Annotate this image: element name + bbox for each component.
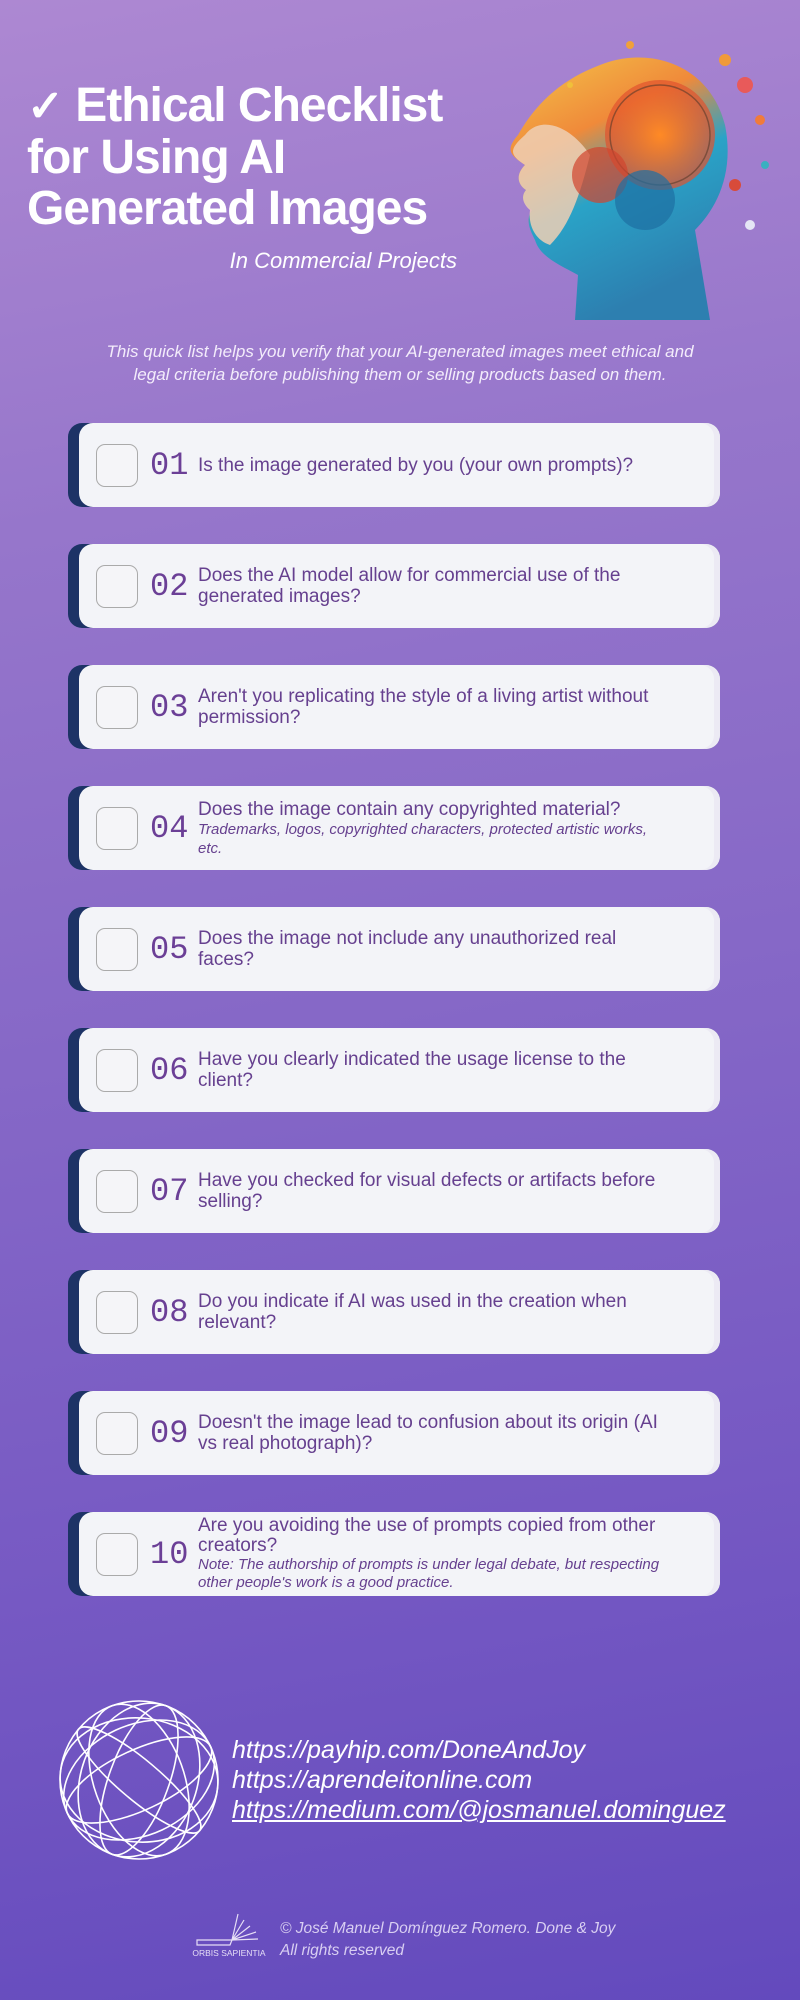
card 03: [68, 665, 720, 749]
card 09: [68, 1391, 720, 1475]
copyright: © José Manuel Domínguez Romero. Done & Joy: [280, 1920, 615, 1937]
card 01: 01: [150, 446, 188, 484]
card 10: [68, 1512, 720, 1596]
card 07: 07: [150, 1172, 188, 1210]
card 09: 09: [150, 1414, 188, 1452]
card 05: Does the image not include any unauthorized real faces?: [198, 928, 616, 970]
card 07: Have you checked for visual defects or artifacts before selling?: [198, 1170, 655, 1212]
card 06: [68, 1028, 720, 1112]
card 06: Have you clearly indicated the usage license to the client?: [198, 1049, 626, 1091]
card 07: [68, 1149, 720, 1233]
card 08: 08: [150, 1294, 188, 1330]
intro text: This quick list helps you verify that your AI-generated images meet ethical and legal criteria before publishing them or selling products based on them.: [106, 342, 694, 384]
card 08: Do you indicate if AI was used in the creation when relevant?: [198, 1291, 627, 1333]
card 02: [68, 544, 720, 628]
card 02: Does the AI model allow for commercial use of the generated images?: [198, 565, 620, 607]
card 10: Are you avoiding the use of prompts copied from other creators?: [198, 1515, 655, 1556]
card 09: Doesn't the image lead to confusion about its origin (AI vs real photograph)?: [198, 1412, 658, 1454]
card 05: [68, 907, 720, 991]
card 08: [68, 1270, 720, 1354]
logo: Orbis Sapientia: ORBIS SAPIENTIA: [192, 1948, 266, 1958]
links: https://aprendeitonline.com: [232, 1766, 532, 1794]
card 01: Is the image generated by you (your own prompts)?: [198, 454, 633, 476]
card 10: 10: [150, 1536, 188, 1572]
title: ✓ Ethical Checklist for Using AI Generated Images: [27, 79, 442, 235]
links: https://medium.com/@josmanuel.dominguez: [232, 1796, 726, 1824]
card 02: 02: [150, 568, 188, 604]
copyright: All rights reserved: [280, 1942, 404, 1959]
card 03: 03: [150, 688, 188, 726]
logo: Orbis Sapientia: [192, 1914, 266, 1958]
subtitle: In Commercial Projects: [230, 248, 457, 273]
card 04: Does the image contain any copyrighted material?: [198, 798, 620, 820]
icon: globe: [59, 1700, 219, 1860]
card 03: Aren't you replicating the style of a living artist without permission?: [198, 686, 648, 728]
card 04: Trademarks, logos, copyrighted characters, protected artistic works, etc.: [198, 820, 647, 856]
links: https://payhip.com/DoneAndJoy: [232, 1736, 585, 1764]
card 05: 05: [150, 930, 188, 968]
card 04: [68, 786, 720, 870]
copyright: [279, 1920, 616, 1959]
links: [232, 1736, 726, 1824]
illustration: colorful head: [510, 41, 769, 320]
card 04: 04: [150, 810, 188, 846]
card 06: 06: [150, 1052, 188, 1088]
card 01: [68, 423, 720, 507]
card 10: Note: The authorship of prompts is under legal debate, but respecting other people's work is a good practice.: [198, 1556, 659, 1591]
